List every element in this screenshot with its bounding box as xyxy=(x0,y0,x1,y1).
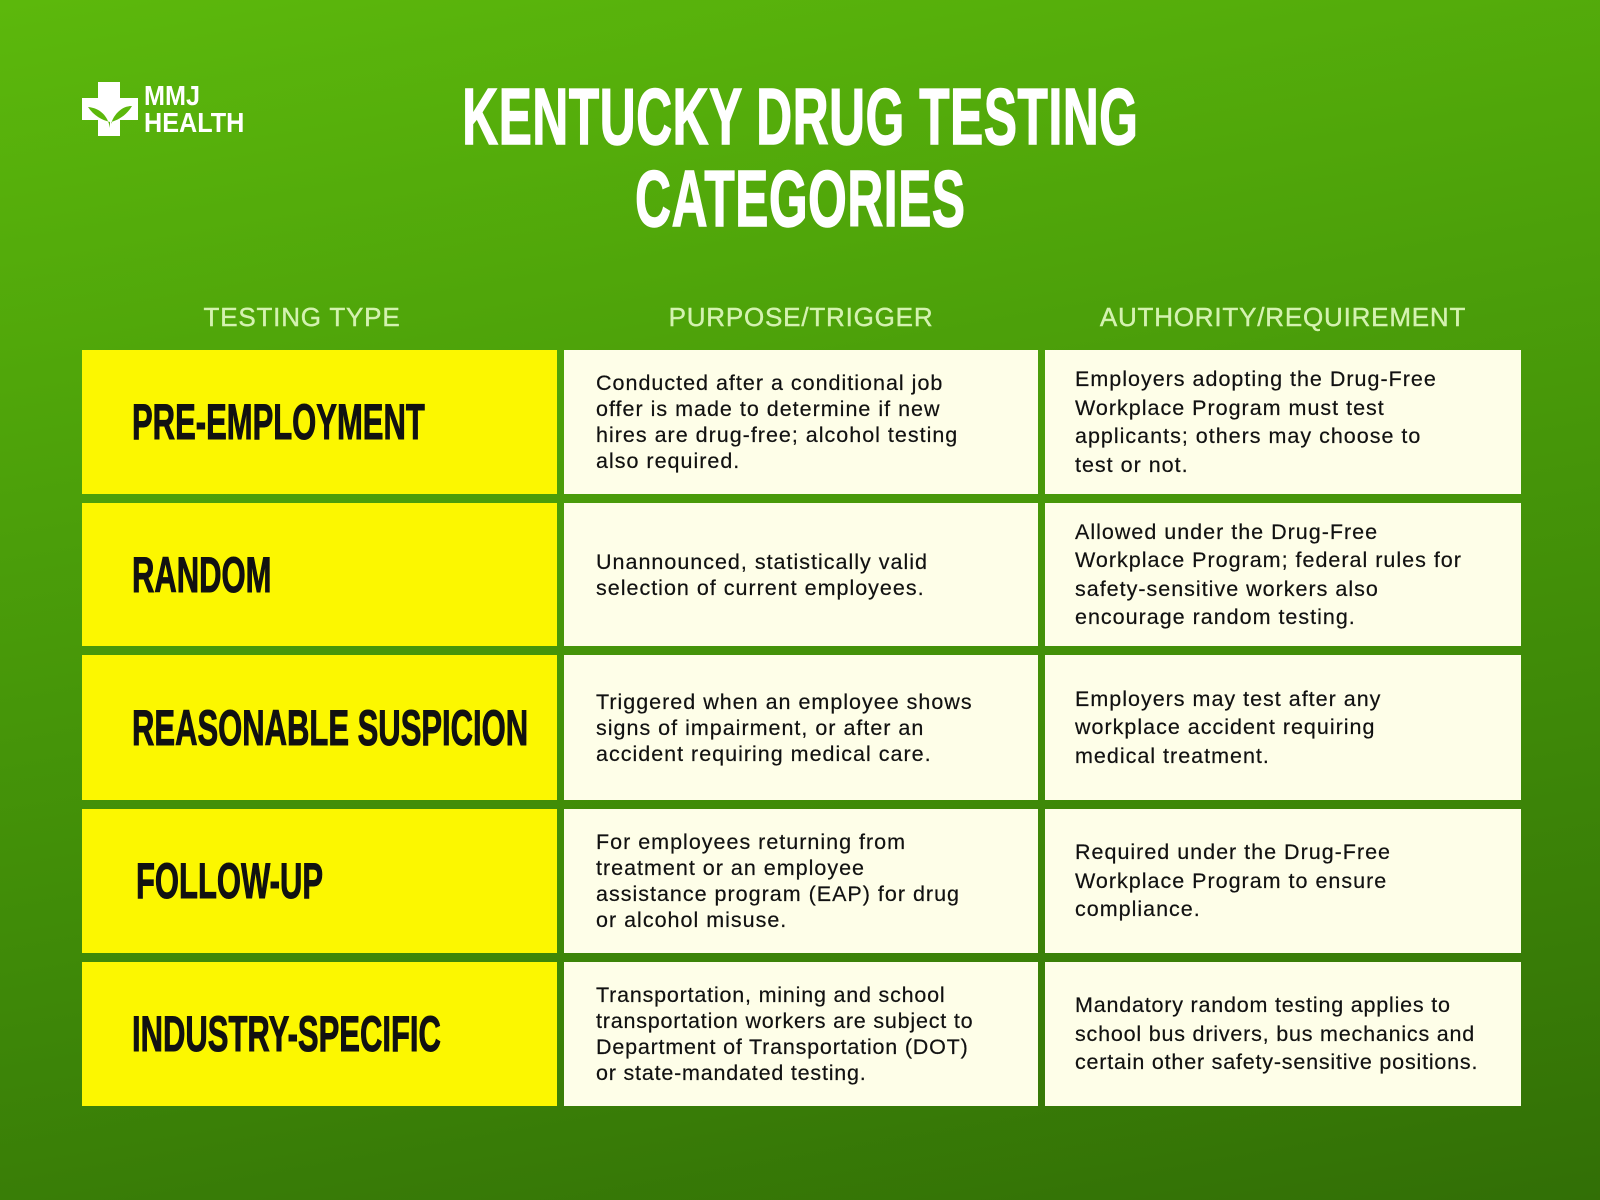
row 4: For employees returning from xyxy=(596,830,906,854)
title xyxy=(462,72,1138,243)
row 4: treatment or an employee xyxy=(596,856,865,880)
row 2 xyxy=(82,503,1521,646)
row 4 xyxy=(82,809,1521,953)
row 3: Triggered when an employee shows xyxy=(596,690,973,714)
header: testing type: TESTING TYPE xyxy=(204,302,400,332)
header: purpose: PURPOSE/TRIGGER xyxy=(669,302,933,332)
row 5: school bus drivers, bus mechanics and xyxy=(1075,1022,1475,1046)
row 4: assistance program (EAP) for drug xyxy=(596,882,960,906)
logo: HEALTH xyxy=(144,107,244,138)
row 4: compliance. xyxy=(1075,897,1201,921)
row 3: accident requiring medical care. xyxy=(596,742,932,766)
row 4: Workplace Program to ensure xyxy=(1075,869,1387,893)
row 5: INDUSTRY-SPECIFIC xyxy=(132,1006,441,1062)
row 5: Transportation, mining and school xyxy=(596,983,945,1007)
header: authority: AUTHORITY/REQUIREMENT xyxy=(1100,302,1466,332)
row 1: test or not. xyxy=(1075,452,1189,476)
row 3: signs of impairment, or after an xyxy=(596,716,924,740)
row 1: Conducted after a conditional job xyxy=(596,371,943,395)
row 3: workplace accident requiring xyxy=(1075,715,1375,739)
row 2: selection of current employees. xyxy=(596,576,925,600)
row 3: Employers may test after any xyxy=(1075,687,1381,711)
text: KENTUCKY DRUG TESTING xyxy=(462,72,1138,161)
logo xyxy=(82,80,244,138)
row 5: Department of Transportation (DOT) xyxy=(596,1035,969,1059)
row 4: Required under the Drug-Free xyxy=(1075,840,1391,864)
row 5: certain other safety-sensitive positions. xyxy=(1075,1050,1478,1074)
row 5: Mandatory random testing applies to xyxy=(1075,993,1451,1017)
text: CATEGORIES xyxy=(635,154,966,243)
row 5 xyxy=(82,962,1521,1106)
row 1: hires are drug-free; alcohol testing xyxy=(596,423,958,447)
row 4: or alcohol misuse. xyxy=(596,908,787,932)
row 1: Workplace Program must test xyxy=(1075,396,1385,420)
row 2: RANDOM xyxy=(132,546,271,602)
row 5: or state-mandated testing. xyxy=(596,1061,867,1085)
row 2: encourage random testing. xyxy=(1075,605,1356,629)
row 3: REASONABLE SUSPICION xyxy=(132,700,528,756)
row 2: Unannounced, statistically valid xyxy=(596,550,928,574)
row 1 xyxy=(82,350,1521,494)
row 2: Allowed under the Drug-Free xyxy=(1075,520,1378,544)
row 3 xyxy=(82,655,1521,800)
row 2: Workplace Program; federal rules for xyxy=(1075,548,1462,572)
row 1: Employers adopting the Drug-Free xyxy=(1075,367,1437,391)
row 1: also required. xyxy=(596,449,740,473)
row 4: FOLLOW-UP xyxy=(136,853,323,909)
row 1: offer is made to determine if new xyxy=(596,397,941,421)
row 1: applicants; others may choose to xyxy=(1075,424,1421,448)
row 5: transportation workers are subject to xyxy=(596,1009,973,1033)
row 3: medical treatment. xyxy=(1075,744,1270,768)
row 1: PRE-EMPLOYMENT xyxy=(132,394,425,450)
logo: MMJ xyxy=(144,80,200,111)
row 2: safety-sensitive workers also xyxy=(1075,576,1379,600)
